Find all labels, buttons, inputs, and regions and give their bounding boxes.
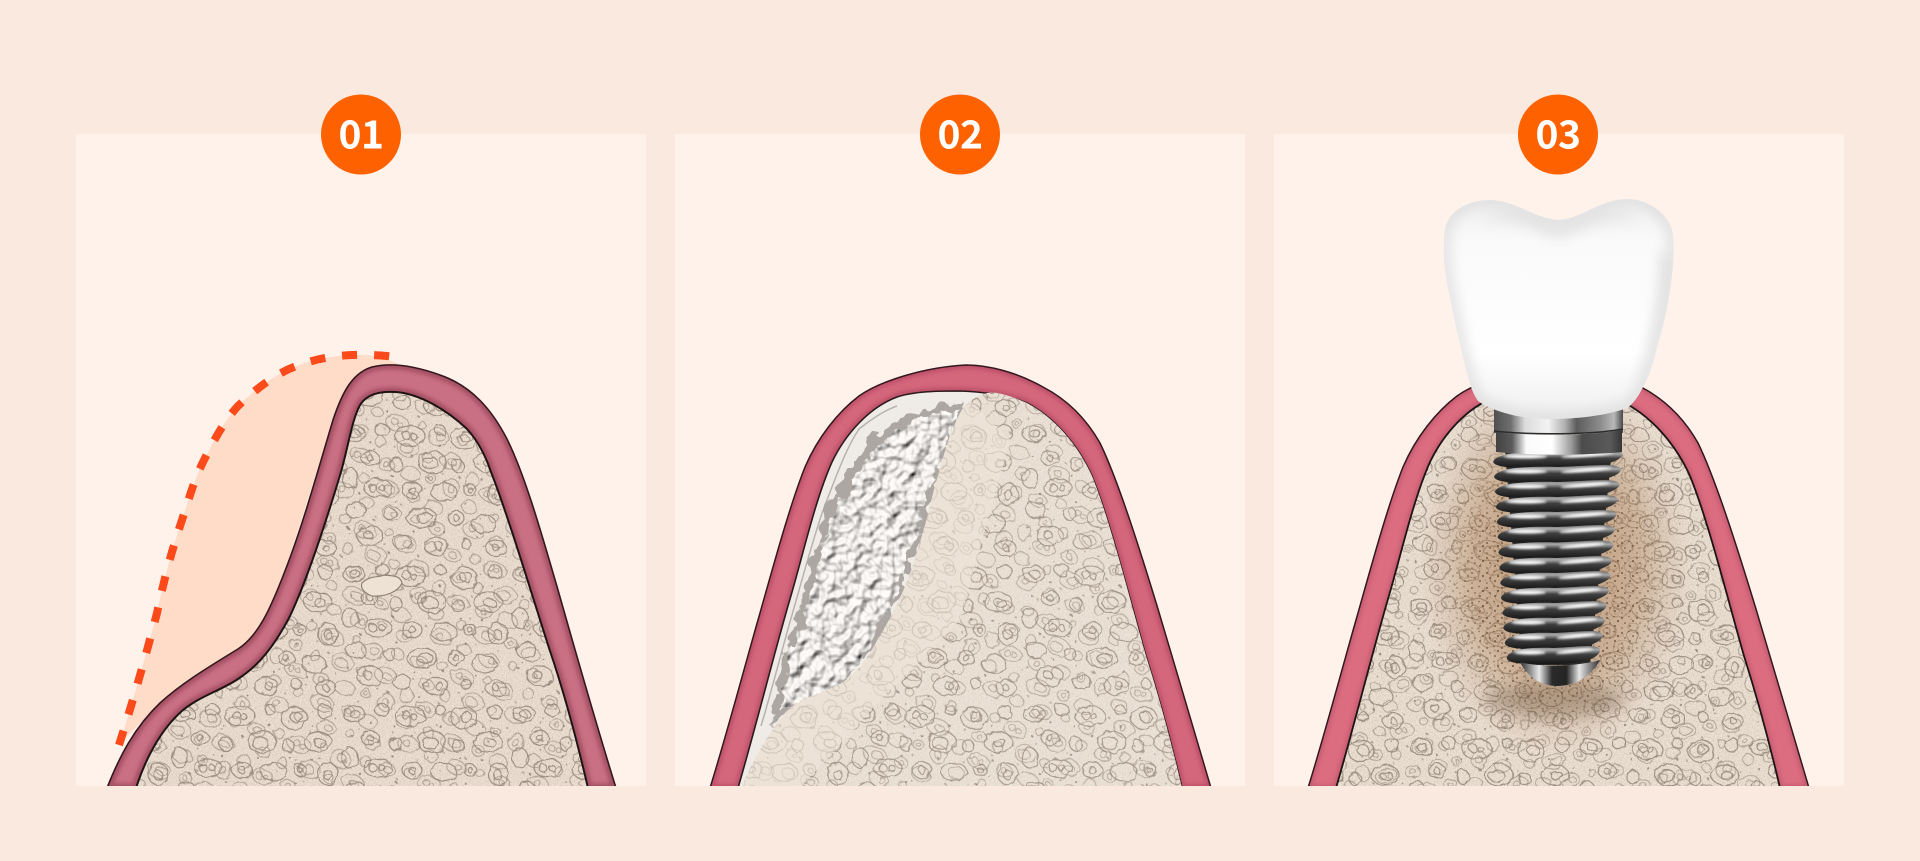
step 02 illustration: grafted ridge — [710, 365, 1211, 790]
dashed target contour — [119, 355, 392, 745]
panel 03 background — [1274, 134, 1844, 786]
panel 01 background — [76, 134, 646, 786]
badge 01: 01 — [338, 104, 384, 160]
gum tissue — [1308, 365, 1809, 788]
crown shading — [1444, 199, 1674, 419]
step 01 illustration: resorbed ridge — [100, 355, 620, 790]
badge 01 — [321, 94, 401, 174]
implant tip — [1520, 660, 1600, 686]
implant — [1493, 408, 1623, 686]
crown — [1444, 199, 1674, 419]
badge 02 — [920, 94, 1000, 174]
implant core — [1505, 450, 1612, 665]
missing bone area — [119, 355, 400, 745]
step 03 illustration: implant in place — [1308, 199, 1809, 790]
host bone — [742, 392, 1182, 786]
panel: step 03 — [1274, 94, 1844, 790]
badge 03 — [1518, 94, 1598, 174]
abutment collar — [1494, 408, 1623, 455]
badge 02: 02 — [937, 104, 983, 160]
panel: step 02 — [675, 94, 1245, 790]
panel: step 01 — [76, 94, 646, 790]
bone with healing halo — [1336, 402, 1780, 786]
bone graft granules — [771, 404, 966, 727]
gum tissue — [710, 365, 1211, 788]
panel 02 background — [675, 134, 1245, 786]
membrane space — [738, 391, 1182, 788]
bone — [136, 390, 588, 786]
implant threads — [1493, 450, 1623, 664]
badge 03: 03 — [1535, 104, 1581, 160]
gum tissue — [107, 365, 616, 788]
